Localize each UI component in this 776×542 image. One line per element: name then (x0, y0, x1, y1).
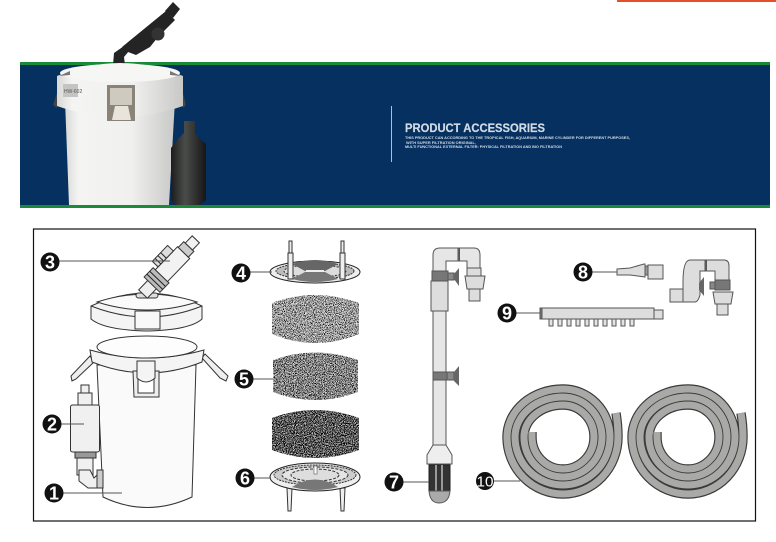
hose right (632, 389, 743, 494)
body (65, 100, 175, 205)
leader lines (50, 261, 617, 493)
hose left (507, 389, 618, 494)
rim band (90, 350, 204, 373)
part 1: canister body (71, 336, 228, 508)
part 8: nozzle (617, 264, 663, 279)
number badges (40, 252, 592, 504)
part 5: foam sponges (272, 295, 359, 458)
valve (131, 228, 204, 302)
panel: accessories diagram (34, 229, 756, 521)
number badges: 5 (239, 370, 249, 390)
part 10: hoses (507, 389, 743, 494)
product photo: filter canister: HW-602 (64, 89, 82, 95)
part 6: bottom plate (270, 463, 360, 511)
number badges: 2 (47, 414, 57, 434)
banner (20, 62, 770, 208)
product photo: filter canister (53, 2, 206, 205)
banner description: MULTI FUNCTIONAL EXTERNAL FILTER: PHYSICAL FILTRATION AND BIO FILTRATION (405, 144, 562, 149)
valve (113, 2, 180, 65)
banner description: WITH SUPER FILTRATION ORIGINAL, (406, 140, 476, 145)
number badges: 10 (476, 474, 494, 490)
clips (71, 356, 94, 381)
number badges: 7 (389, 472, 399, 492)
foam 1 (272, 295, 359, 343)
banner heading: PRODUCT ACCESSORIES (405, 123, 545, 135)
part 4: top plate (270, 241, 360, 283)
number badges: 6 (240, 468, 250, 488)
pump canister (171, 121, 206, 205)
foam 2 (273, 352, 358, 400)
number badges: 1 (49, 484, 59, 504)
lid (91, 293, 202, 331)
top accent bar (617, 0, 776, 2)
part 7: intake pipe (427, 248, 485, 503)
part 9: spray bar (540, 308, 663, 326)
foam 3 (272, 410, 359, 458)
part 2: pump canister (70, 385, 103, 488)
number badges: 8 (578, 262, 588, 282)
number badges: 9 (502, 304, 512, 324)
elbow pipe (670, 260, 733, 315)
lid (57, 63, 183, 117)
latch (107, 85, 135, 121)
banner description: THIS PRODUCT CAN ACCORDING TO THE TROPICAL FISH, AQUARIUM, MARINE CYLINDER FOR DIFFERENT PURPOSES, (405, 135, 630, 140)
latch (133, 371, 159, 397)
number badges: 3 (45, 252, 55, 272)
number badges: 4 (236, 264, 246, 284)
divider line (391, 106, 392, 162)
label on lid (63, 84, 78, 97)
clips (53, 93, 186, 108)
banner description (405, 135, 630, 149)
part 3: valve and lid (91, 228, 204, 331)
